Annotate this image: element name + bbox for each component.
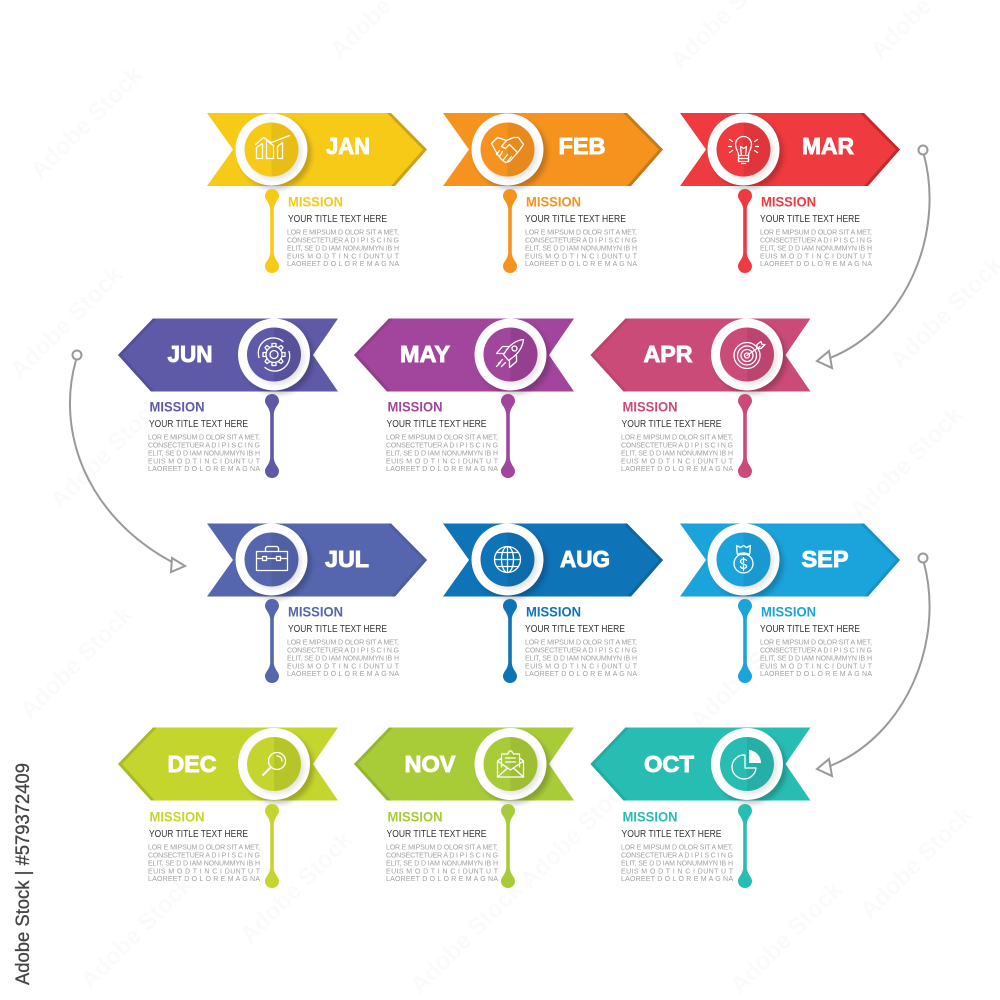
banner: MAY [354,318,574,392]
text block: LAOREET D O L O R E M A G NA [621,876,733,883]
text block: EUIS M O D T I N C I DUNT U T [287,664,400,670]
text block: YOUR TITLE TEXT HERE [760,213,860,225]
month label: AUG: AUG [560,546,610,572]
panel: OCT [590,728,810,888]
banner: APR [590,318,810,392]
text block: LAOREET D O L O R E M A G NA [148,876,260,883]
connector pin [503,599,517,683]
month label: MAR: MAR [802,133,854,159]
text block: CONSECTETUER A D I P I S C I N G [287,238,399,244]
text block: ELIT, SE D D IAM NONUMMYN IB H [760,656,872,662]
banner: JAN [207,113,427,186]
text block: CONSECTETUER A D I P I S C I N G [287,648,399,654]
banner: SEP [680,524,900,596]
text block: MISSION [761,604,816,620]
connector pin [738,189,752,273]
connector pin [265,599,279,683]
panel: AUG [443,524,663,683]
text block: CONSECTETUER A D I P I S C I N G [525,238,637,244]
text block: EUIS M O D T I N C I DUNT U T [621,868,734,876]
text block [287,194,400,268]
text block: MISSION [288,604,343,620]
text block: EUIS M O D T I N C I DUNT U T [148,458,261,466]
panel: NOV [354,728,574,888]
text block [760,604,873,678]
banner: NOV [354,728,574,800]
banner: MAR [680,113,900,186]
connector pin [501,394,515,478]
text block: LAOREET D O L O R E M A G NA [760,671,872,678]
text block: YOUR TITLE TEXT HERE [149,828,248,840]
text block: LOR E MIPSUM D OLOR SIT A MET, [287,230,399,236]
text block: MISSION [622,808,678,824]
text block: LOR E MIPSUM D OLOR SIT A MET, [621,434,733,442]
banner: DEC [118,728,338,800]
text block: YOUR TITLE TEXT HERE [386,418,486,430]
arrow: MAR to APR [817,146,930,368]
text block: CONSECTETUER A D I P I S C I N G [525,648,637,654]
month label: JUL: JUL [325,546,369,572]
text block: LOR E MIPSUM D OLOR SIT A MET, [621,844,733,852]
text block: YOUR TITLE TEXT HERE [622,828,722,840]
icon: magnifier [238,728,314,804]
text block: LOR E MIPSUM D OLOR SIT A MET, [148,844,260,852]
connector pin [265,804,279,888]
text block: YOUR TITLE TEXT HERE [288,213,387,225]
text block: MISSION [526,194,581,210]
text block: YOUR TITLE TEXT HERE [386,828,486,840]
month label: MAY: MAY [400,341,450,367]
banner: JUN [118,318,338,392]
banner: AUG [443,524,663,596]
icon: globe [472,524,548,600]
text block: EUIS M O D T I N C I DUNT U T [760,664,873,670]
connector pin [738,599,752,683]
arrow: JUN to JUL [70,350,185,572]
connector pin [501,804,515,888]
text block: LAOREET D O L O R E M A G NA [525,671,637,678]
text block: ELIT, SE D D IAM NONUMMYN IB H [148,450,260,458]
text block: YOUR TITLE TEXT HERE [622,418,722,430]
text block [760,194,873,268]
text block: ELIT, SE D D IAM NONUMMYN IB H [148,860,260,868]
month label: DEC: DEC [168,751,216,777]
text block: ELIT, SE D D IAM NONUMMYN IB H [386,450,498,458]
text block: CONSECTETUER A D I P I S C I N G [760,238,872,244]
month label: FEB: FEB [558,133,606,159]
text block: LAOREET D O L O R E M A G NA [760,261,872,268]
month label: NOV: NOV [404,751,456,777]
month label: JUN: JUN [168,341,212,367]
text block: LOR E MIPSUM D OLOR SIT A MET, [760,230,872,236]
text block: ELIT, SE D D IAM NONUMMYN IB H [525,656,637,662]
text block: EUIS M O D T I N C I DUNT U T [386,868,499,876]
icon: envelope [474,728,550,804]
text block: LAOREET D O L O R E M A G NA [287,261,399,268]
connector pin [738,394,752,478]
text block [386,398,499,473]
text block: ELIT, SE D D IAM NONUMMYN IB H [287,246,399,252]
text block: LAOREET D O L O R E M A G NA [148,466,260,473]
text block: LAOREET D O L O R E M A G NA [621,466,733,473]
text block: LOR E MIPSUM D OLOR SIT A MET, [148,434,260,442]
icon: growth chart [236,114,312,190]
text block: LAOREET D O L O R E M A G NA [525,261,637,268]
text block: MISSION [526,604,581,620]
text block: EUIS M O D T I N C I DUNT U T [525,254,638,260]
text block [287,604,400,678]
text block: LOR E MIPSUM D OLOR SIT A MET, [760,640,872,646]
text block: EUIS M O D T I N C I DUNT U T [148,868,261,876]
text block: YOUR TITLE TEXT HERE [288,623,387,635]
panel: FEB [443,113,663,273]
text block [148,808,261,883]
text block: MISSION [622,398,678,414]
text block: CONSECTETUER A D I P I S C I N G [621,852,733,860]
text block: ELIT, SE D D IAM NONUMMYN IB H [760,246,872,252]
connector pin [265,189,279,273]
text block: YOUR TITLE TEXT HERE [149,418,248,430]
text block: CONSECTETUER A D I P I S C I N G [386,852,498,860]
panel: MAY [354,318,574,478]
text block: LAOREET D O L O R E M A G NA [386,876,498,883]
arrow: SEP to OCT [817,554,930,776]
text block: LOR E MIPSUM D OLOR SIT A MET, [287,640,399,646]
month label: SEP: SEP [802,546,848,572]
text block: CONSECTETUER A D I P I S C I N G [148,852,260,860]
text block: YOUR TITLE TEXT HERE [525,623,625,635]
panel: MAR [680,113,900,273]
month label: JAN: JAN [326,133,370,159]
icon: pie chart [711,728,787,804]
text block [525,194,638,268]
text block: LOR E MIPSUM D OLOR SIT A MET, [525,640,637,646]
text block: MISSION [150,398,204,414]
text block: ELIT, SE D D IAM NONUMMYN IB H [621,860,733,868]
text block: ELIT, SE D D IAM NONUMMYN IB H [525,246,637,252]
connector pin [738,804,752,888]
text block: LOR E MIPSUM D OLOR SIT A MET, [386,844,498,852]
text block: YOUR TITLE TEXT HERE [760,623,860,635]
text block [621,808,734,883]
text block [148,398,261,473]
text block: CONSECTETUER A D I P I S C I N G [148,442,260,450]
icon: money bag [708,524,784,600]
text block: CONSECTETUER A D I P I S C I N G [386,442,498,450]
text block: EUIS M O D T I N C I DUNT U T [621,458,734,466]
panel: APR [590,318,810,478]
text block: CONSECTETUER A D I P I S C I N G [760,648,872,654]
text block: EUIS M O D T I N C I DUNT U T [386,458,499,466]
text block [386,808,499,883]
text block: MISSION [761,194,816,210]
banner: OCT [590,728,810,800]
text block: LAOREET D O L O R E M A G NA [386,466,498,473]
text block [525,604,638,678]
text block [621,398,734,473]
month label: APR: APR [644,341,693,367]
text block: MISSION [388,398,442,414]
panel: JUN [118,318,338,478]
text block: EUIS M O D T I N C I DUNT U T [287,254,400,260]
text block: ELIT, SE D D IAM NONUMMYN IB H [287,656,399,662]
banner: FEB [443,113,663,186]
stock credit: Adobe Stock | #579372409 [13,763,34,985]
icon: handshake [472,114,548,190]
text block: ELIT, SE D D IAM NONUMMYN IB H [621,450,733,458]
text block: YOUR TITLE TEXT HERE [525,213,626,225]
icon: gear cycle [238,318,314,394]
text block: LOR E MIPSUM D OLOR SIT A MET, [525,230,637,236]
icon: light bulb [708,114,784,190]
icon: briefcase [236,524,312,600]
text block: EUIS M O D T I N C I DUNT U T [525,664,638,670]
banner: JUL [207,524,427,596]
month label: OCT: OCT [644,751,694,777]
text block: MISSION [288,194,343,210]
text block: MISSION [150,808,204,824]
text block: CONSECTETUER A D I P I S C I N G [621,442,733,450]
icon: rocket [474,318,550,394]
panel: JAN [207,113,427,273]
panel: DEC [118,728,338,888]
connector pin [265,394,279,478]
panel: JUL [207,524,427,683]
text block: EUIS M O D T I N C I DUNT U T [760,254,873,260]
text block: LOR E MIPSUM D OLOR SIT A MET, [386,434,498,442]
text block: ELIT, SE D D IAM NONUMMYN IB H [386,860,498,868]
connector pin [503,189,517,273]
icon: target [711,318,787,394]
text block: LAOREET D O L O R E M A G NA [287,671,399,678]
text block: MISSION [388,808,442,824]
panel: SEP [680,524,900,683]
